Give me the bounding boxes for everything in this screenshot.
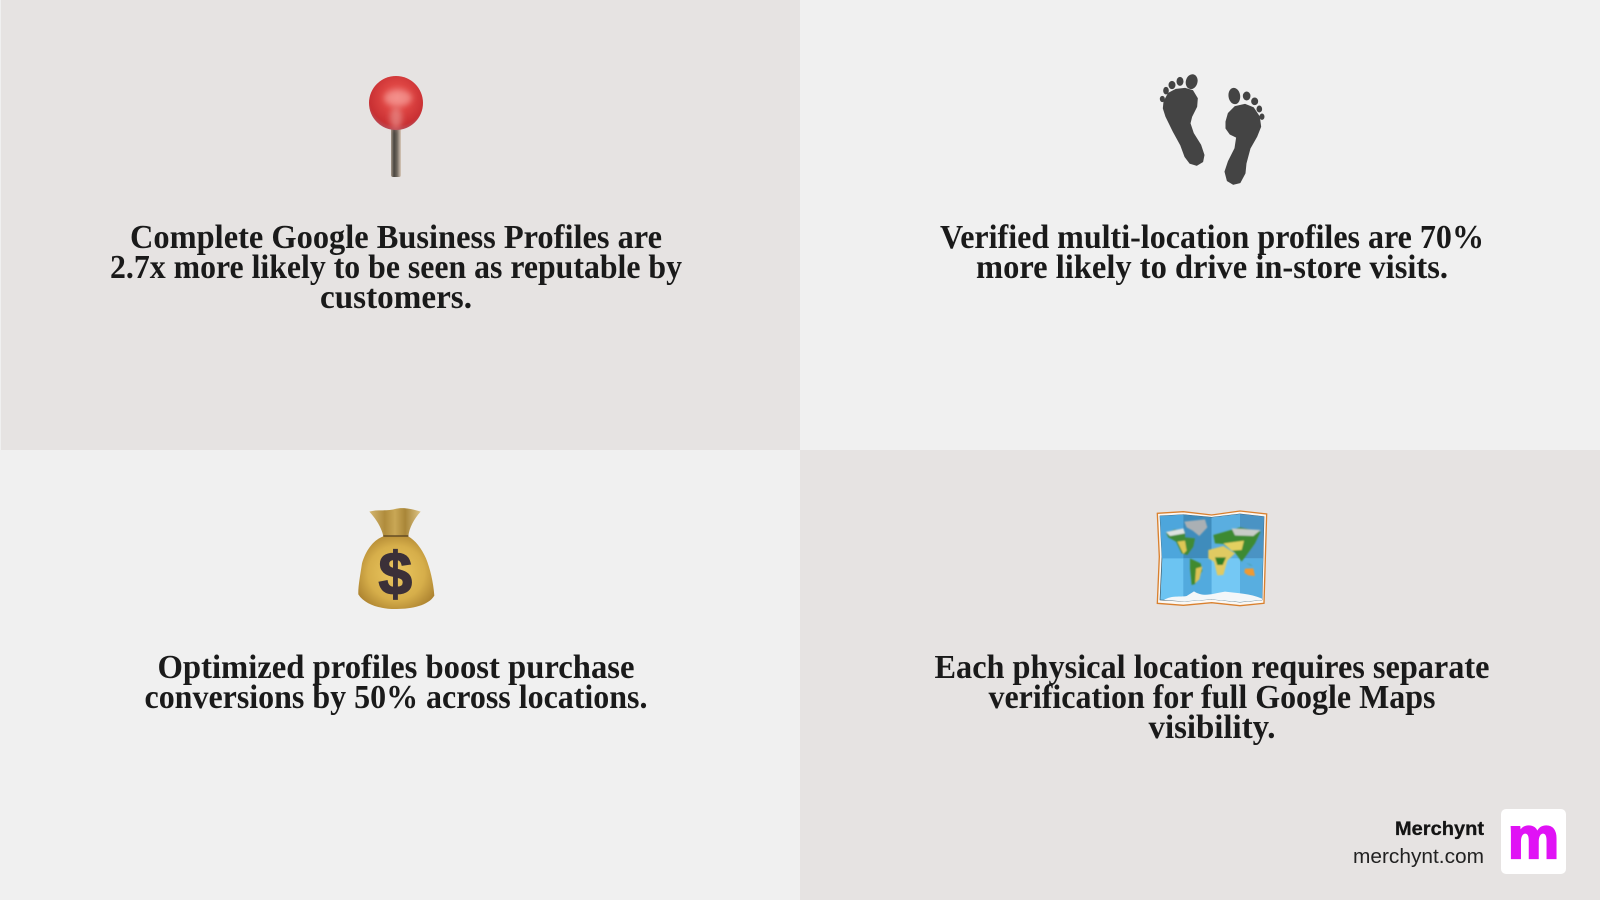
- brand name: Merchynt: [1395, 819, 1485, 840]
- heading: optimized profiles: [144, 649, 648, 716]
- brand footer: [1353, 806, 1566, 874]
- heading: verified profiles: more likely to drive in-store visits.: [976, 249, 1448, 286]
- heading: complete profiles: [110, 219, 682, 316]
- heading: verified profiles: Verified multi-location profiles are 70%: [940, 219, 1484, 256]
- heading: complete profiles: Complete Google Business Profiles are: [130, 219, 662, 256]
- panel: in-store visits: [800, 0, 1600, 450]
- heading: separate verification: visibility.: [1148, 709, 1276, 746]
- logo: m: [1508, 806, 1559, 871]
- icon: world map: [1157, 511, 1267, 606]
- panel: location verification: [800, 450, 1600, 900]
- heading: optimized profiles: conversions by 50% across locations.: [144, 679, 648, 716]
- icon: round pushpin: [369, 76, 423, 177]
- heading: complete profiles: 2.7x more likely to be seen as reputable by: [110, 249, 682, 286]
- heading: complete profiles: customers.: [320, 279, 472, 316]
- heading: optimized profiles: Optimized profiles boost purchase: [158, 649, 634, 686]
- panel: purchase conversions: [0, 450, 800, 900]
- heading: separate verification: verification for full Google Maps: [988, 679, 1436, 716]
- icon: money bag: [358, 508, 434, 609]
- heading: verified profiles: [940, 219, 1484, 286]
- heading: separate verification: [934, 649, 1490, 746]
- heading: separate verification: Each physical location requires separate: [934, 649, 1490, 686]
- brand url: merchynt.com: [1353, 846, 1484, 868]
- panel: reputable profiles: [0, 0, 800, 450]
- icon: money bag: $: [379, 540, 412, 607]
- icon: footprints: [1160, 74, 1264, 184]
